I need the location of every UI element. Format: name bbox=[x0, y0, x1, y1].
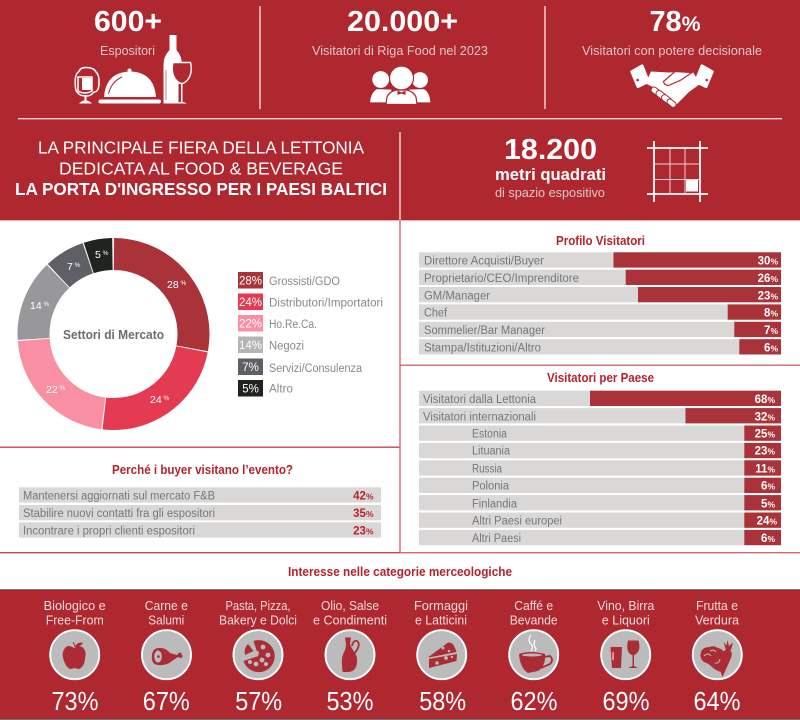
category: organic: 73% bbox=[52, 686, 98, 716]
top banner bbox=[0, 0, 800, 220]
legend: 5% bbox=[242, 384, 259, 396]
category: meat bbox=[142, 599, 191, 716]
table: reasons: Mantenersi aggiornati sul mercato F&B bbox=[23, 490, 215, 502]
category: cheese: 58% bbox=[419, 686, 466, 716]
bar chart: profile: Sommelier/Bar Manager bbox=[424, 325, 545, 337]
donut chart: % bbox=[58, 385, 65, 392]
headline: LA PORTA D'INGRESSO PER I PAESI BALTICI bbox=[15, 179, 387, 199]
bar chart: profile bbox=[419, 252, 781, 354]
bar chart: profile: 30% bbox=[758, 256, 778, 268]
legend: Grossisti/GDO bbox=[269, 276, 340, 288]
category: oil and sauces: Olio, Salse bbox=[321, 599, 379, 613]
category: fruit and vegetables: Frutta e bbox=[696, 599, 738, 613]
bar chart: profile: Chef bbox=[424, 308, 448, 320]
legend: 28% bbox=[239, 276, 262, 288]
legend bbox=[238, 272, 383, 396]
stat: visitors bbox=[312, 6, 488, 58]
stat: visitors: 20.000+ bbox=[347, 6, 458, 38]
legend: 7% bbox=[242, 362, 259, 374]
category: wine and spirits: Vino, Birra bbox=[597, 599, 654, 613]
bar chart: profile: 6% bbox=[764, 342, 778, 354]
panel: market sectors bbox=[0, 220, 800, 448]
heading: Profilo Visitatori bbox=[556, 234, 645, 248]
donut chart: 7 bbox=[67, 261, 73, 273]
donut chart: % bbox=[179, 280, 186, 287]
bar chart: country: Finlandia bbox=[472, 498, 518, 510]
panel: product categories bbox=[0, 589, 800, 720]
stat: exhibitors: Espositori bbox=[100, 44, 155, 58]
legend: 24% bbox=[239, 297, 262, 309]
bar chart: country: Russia bbox=[472, 464, 503, 476]
stat: decision makers: Visitatori con potere decisionale bbox=[582, 44, 762, 58]
table: reasons bbox=[19, 487, 381, 538]
bar chart: profile: Direttore Acquisti/Buyer bbox=[424, 256, 544, 268]
bar chart: country: Altri Paesi europei bbox=[472, 516, 562, 528]
bar chart: country: Visitatori dalla Lettonia bbox=[423, 394, 537, 406]
donut chart: % bbox=[162, 395, 169, 402]
table: reasons: 42% bbox=[353, 490, 374, 502]
donut chart: % bbox=[73, 262, 81, 269]
category: cheese bbox=[414, 599, 468, 716]
category: oil and sauces bbox=[313, 599, 387, 716]
category: organic: Free-From bbox=[46, 614, 104, 628]
category: meat: Carne e bbox=[145, 599, 188, 613]
headline: LA PRINCIPALE FIERA DELLA LETTONIA bbox=[38, 138, 364, 158]
legend: Ho.Re.Ca. bbox=[269, 319, 317, 331]
bar chart: country: Lituania bbox=[472, 446, 511, 458]
donut chart: 5 bbox=[95, 249, 101, 261]
bar chart: profile: 8% bbox=[764, 308, 778, 320]
bar chart: country: 68% bbox=[755, 394, 775, 406]
panel: visitors by country bbox=[400, 371, 800, 553]
legend: Negozi bbox=[269, 340, 304, 352]
headline bbox=[15, 138, 387, 199]
stat: exhibition space: 18.200 bbox=[504, 134, 597, 166]
bar chart: country: 6% bbox=[761, 480, 775, 492]
category: coffee: Caffé e bbox=[514, 599, 553, 613]
bar chart: country: 23% bbox=[755, 446, 775, 458]
bar chart: country: Altri Paesi bbox=[472, 533, 521, 545]
icon: floor plan grid bbox=[647, 141, 708, 202]
bar chart: profile: GM/Manager bbox=[424, 290, 490, 302]
bar chart: country: 25% bbox=[755, 429, 775, 441]
legend: 14% bbox=[239, 340, 262, 352]
icon: beer glass bbox=[75, 68, 99, 104]
stat: decision makers bbox=[582, 6, 762, 58]
icon: handshake bbox=[630, 64, 714, 108]
legend: Altro bbox=[269, 384, 293, 396]
category: pasta and pizza: Pasta, Pizza, bbox=[226, 599, 290, 613]
headline: DEDICATA AL FOOD & BEVERAGE bbox=[59, 158, 343, 178]
category: coffee: Bevande bbox=[510, 614, 558, 628]
category: wine and spirits: 69% bbox=[602, 686, 650, 716]
stat: exhibition space bbox=[495, 134, 606, 200]
bar chart: country: Estonia bbox=[472, 429, 508, 441]
stat: exhibition space: di spazio espositivo bbox=[495, 186, 605, 200]
icon: people bbox=[370, 66, 431, 104]
category: wine and spirits bbox=[597, 599, 654, 716]
category: wine and spirits: e Liquori bbox=[602, 614, 650, 628]
table: reasons: Stabilire nuovi contatti fra gli espositori bbox=[23, 508, 215, 520]
category: oil and sauces: e Condimenti bbox=[313, 614, 387, 628]
bar chart: country: 24% bbox=[757, 516, 777, 528]
category: fruit and vegetables bbox=[693, 599, 742, 716]
donut chart: 14 bbox=[30, 300, 42, 312]
category: oil and sauces: 53% bbox=[326, 686, 374, 716]
category: organic bbox=[44, 599, 106, 716]
category: pasta and pizza bbox=[219, 599, 297, 716]
bar chart: country: 6% bbox=[761, 533, 775, 545]
bar chart: profile: 7% bbox=[764, 325, 778, 337]
panel: visitor profile bbox=[399, 220, 800, 553]
stat: exhibitors: 600+ bbox=[94, 6, 162, 38]
bar chart: country: Visitatori internazionali bbox=[423, 411, 536, 423]
icon: wine bottle and glass bbox=[164, 35, 191, 104]
stat: decision makers: 78% bbox=[650, 6, 701, 38]
stat: exhibition space: metri quadrati bbox=[495, 166, 606, 184]
legend: Servizi/Consulenza bbox=[269, 363, 363, 375]
bar chart: profile: Proprietario/CEO/Imprenditore bbox=[424, 273, 579, 285]
heading: Perché i buyer visitano l’evento? bbox=[112, 463, 293, 477]
legend: Distributori/Importatori bbox=[269, 298, 383, 310]
bar chart: profile: 26% bbox=[758, 273, 778, 285]
table: reasons: 23% bbox=[353, 526, 374, 538]
category: cheese: Formaggi bbox=[414, 599, 468, 613]
heading: Visitatori per Paese bbox=[547, 371, 654, 385]
category: pasta and pizza: Bakery e Dolci bbox=[219, 614, 297, 628]
table: reasons: 35% bbox=[353, 508, 374, 520]
heading: categories: Interesse nelle categorie merceologiche bbox=[288, 565, 512, 579]
category: fruit and vegetables: Verdura bbox=[695, 614, 739, 628]
donut chart: % bbox=[42, 301, 49, 308]
bar chart: country: 11% bbox=[755, 464, 775, 476]
bar chart: country: Polonia bbox=[472, 480, 510, 492]
bar chart: country: 5% bbox=[761, 498, 775, 510]
donut chart: 22 bbox=[46, 384, 58, 396]
category: organic: Biologico e bbox=[44, 599, 106, 613]
donut chart bbox=[30, 249, 194, 414]
category: cheese: e Latticini bbox=[415, 614, 467, 628]
donut chart: % bbox=[101, 250, 109, 257]
bar chart: country bbox=[419, 391, 781, 545]
category: fruit and vegetables: 64% bbox=[694, 686, 740, 716]
legend: 22% bbox=[239, 318, 262, 330]
stat: visitors: Visitatori di Riga Food nel 2023 bbox=[312, 44, 488, 58]
bar chart: country: 32% bbox=[755, 411, 775, 423]
table: reasons: Incontrare i propri clienti espositori bbox=[23, 526, 195, 538]
donut chart: Settori di Mercato bbox=[63, 328, 164, 342]
category: meat: 67% bbox=[143, 686, 190, 716]
stat: exhibitors bbox=[94, 6, 162, 58]
icon: cloche bbox=[98, 68, 161, 104]
category: coffee bbox=[509, 599, 558, 716]
category: pasta and pizza: 57% bbox=[235, 686, 282, 716]
donut chart: 28 bbox=[167, 279, 179, 291]
category: meat: Salumi bbox=[148, 614, 184, 628]
bar chart: profile: 23% bbox=[758, 290, 778, 302]
category: coffee: 62% bbox=[510, 686, 558, 716]
donut chart: 24 bbox=[150, 394, 162, 406]
bar chart: profile: Stampa/Istituzioni/Altro bbox=[424, 342, 541, 354]
panel: why buyers visit bbox=[0, 463, 400, 553]
